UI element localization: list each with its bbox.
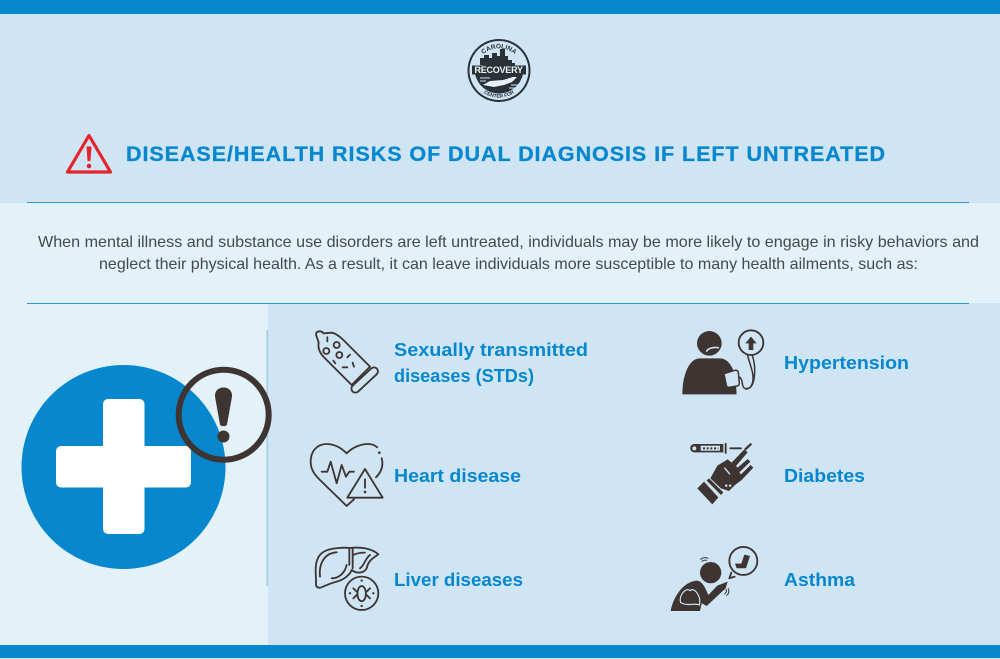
label: liver diseases: Liver diseases bbox=[394, 569, 523, 590]
bottom bar bbox=[0, 645, 1000, 658]
icon: person with asthma inhaler bbox=[671, 547, 757, 611]
label: hypertension: Hypertension bbox=[784, 352, 909, 373]
header panel bbox=[0, 14, 1000, 203]
logo: Carolina Recovery Center: CAROLINA bbox=[482, 44, 516, 54]
icon: glucose meter and finger bbox=[690, 444, 753, 504]
label: asthma: Asthma bbox=[784, 569, 856, 590]
top bar bbox=[0, 0, 1000, 14]
intro text: neglect their physical health. As a result, it can leave individuals more susceptible to many health ailments, such as: bbox=[99, 256, 918, 273]
illustration: medical cross with exclamation bbox=[22, 365, 269, 569]
left illustration panel bbox=[0, 303, 268, 645]
label: heart disease: Heart disease bbox=[394, 465, 521, 486]
intro panel bbox=[0, 203, 1000, 303]
intro text: When mental illness and substance use disorders are left untreated, individuals may be more likely to engage in risky behaviors and bbox=[38, 234, 979, 251]
logo: Carolina Recovery Center bbox=[468, 39, 530, 102]
label: STDs: Sexually transmitted bbox=[394, 339, 588, 360]
label: STDs: diseases (STDs) bbox=[394, 365, 534, 386]
conditions panel bbox=[268, 303, 1000, 645]
icon: heart with warning bbox=[311, 444, 383, 506]
logo: Carolina Recovery Center: CENTER FOR bbox=[484, 90, 514, 98]
logo: Carolina Recovery Center: RECOVERY bbox=[474, 65, 523, 75]
label: diabetes: Diabetes bbox=[784, 465, 865, 486]
icon: red warning triangle bbox=[68, 136, 110, 172]
icon: person with blood pressure cuff bbox=[682, 330, 763, 394]
label: STDs bbox=[394, 339, 588, 386]
intro text bbox=[38, 234, 979, 273]
title: DISEASE/HEALTH RISKS OF DUAL DIAGNOSIS IF LEFT UNTREATED bbox=[126, 142, 885, 166]
icon: condom bbox=[316, 331, 380, 394]
icon: liver with virus bbox=[316, 548, 378, 610]
